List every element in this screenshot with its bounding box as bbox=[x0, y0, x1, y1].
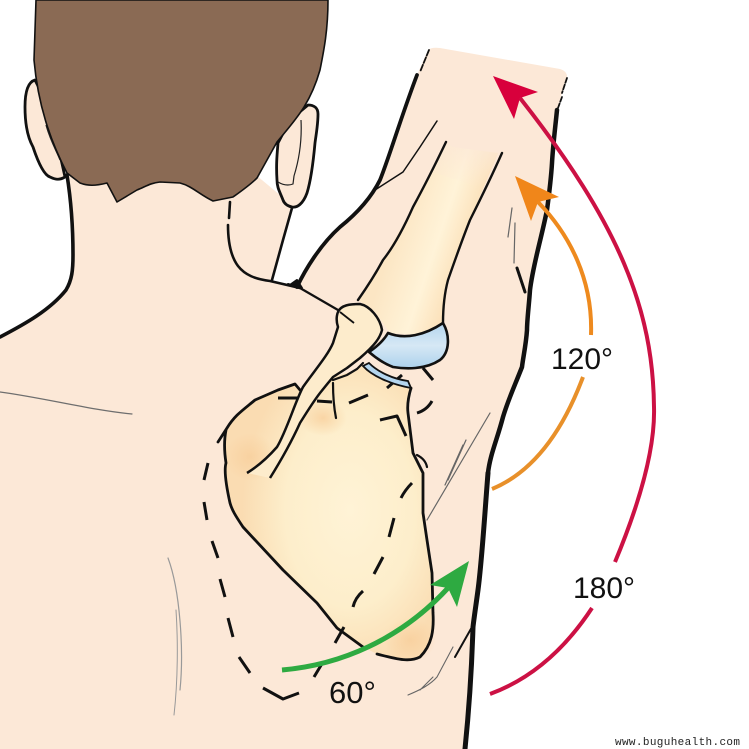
arc: 180 degrees bbox=[490, 76, 654, 694]
label: 120 degrees: 120° bbox=[551, 343, 613, 376]
neck, back and arm outlines bbox=[0, 50, 567, 749]
spine outline bbox=[247, 304, 382, 478]
scapular spine and acromion bbox=[247, 304, 382, 478]
ears bbox=[25, 80, 318, 207]
label: 180 degrees: 180° bbox=[573, 572, 635, 605]
hair bbox=[34, 0, 328, 202]
humerus bone bbox=[358, 142, 502, 335]
glenoid cartilage bbox=[363, 363, 411, 388]
left ear bbox=[25, 80, 65, 179]
ear inner lines bbox=[46, 120, 301, 185]
scapula bone bbox=[218, 363, 436, 662]
right ear bbox=[277, 105, 318, 207]
trapezius tip bbox=[340, 312, 354, 323]
label: 60 degrees: 60° bbox=[329, 675, 376, 710]
watermark: www.buguhealth.com bbox=[615, 737, 740, 749]
humeral head cartilage bbox=[369, 323, 448, 368]
dashed scapula resting position bbox=[204, 368, 433, 699]
arc: 60 degrees bbox=[282, 561, 469, 670]
arc: 120 degrees bbox=[492, 176, 591, 489]
body skin bbox=[0, 48, 567, 749]
